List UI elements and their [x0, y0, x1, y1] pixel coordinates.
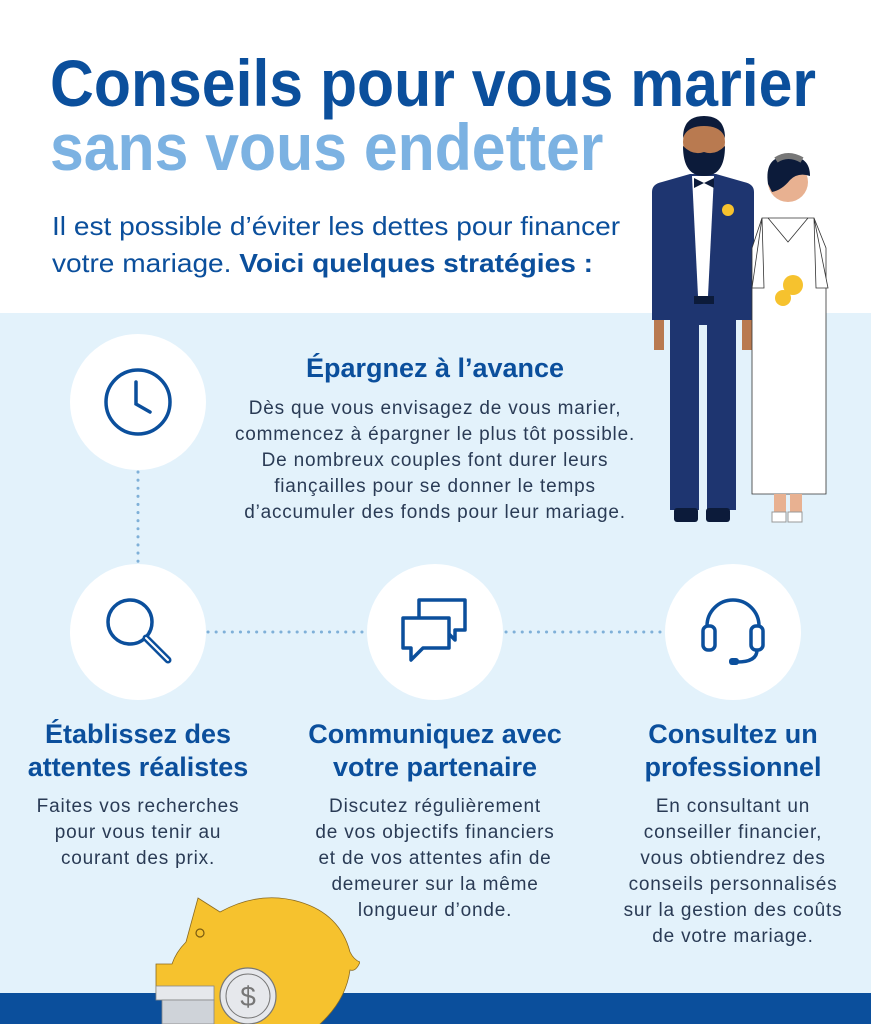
heading: Communiquez: Communiquez avec [308, 719, 562, 749]
text: Épargnez: d’accumuler des fonds pour leur mariage. [244, 502, 626, 523]
text: Consultez: conseiller financier, [644, 822, 822, 843]
title: Conseils pour vous marier [50, 46, 816, 120]
text: Épargnez: commencez à épargner le plus tôt possible. [235, 424, 635, 445]
icon: headset [665, 564, 801, 700]
heading: Établissez [28, 719, 248, 782]
text: Communiquez: longueur d’onde. [358, 900, 512, 921]
heading: Établissez: attentes réalistes [28, 752, 248, 782]
text: Consultez: sur la gestion des coûts [624, 900, 842, 921]
heading: Consultez: Consultez un [648, 719, 818, 749]
light blue band [0, 313, 871, 993]
title [50, 46, 816, 184]
text: Établissez: Faites vos recherches [37, 796, 239, 817]
heading: Consultez [644, 719, 822, 782]
heading: Épargnez: Épargnez à l’avance [306, 353, 564, 383]
subtitle: votre mariage. Voici quelques stratégies : [52, 248, 593, 278]
text: Établissez: courant des prix. [61, 848, 215, 869]
icon: magnifier [70, 564, 206, 700]
text: Consultez [624, 796, 842, 947]
groom [652, 116, 754, 522]
icon: chat bubbles [367, 564, 503, 700]
text: Épargnez [235, 398, 635, 523]
heading: Établissez: Établissez des [45, 719, 231, 749]
text: Consultez: conseils personnalisés [629, 874, 837, 895]
heading: Communiquez: votre partenaire [333, 752, 537, 782]
bride [752, 156, 828, 522]
text: Consultez: En consultant un [656, 796, 810, 817]
text: Communiquez: et de vos attentes afin de [318, 848, 552, 869]
icon: clock [70, 334, 206, 470]
subtitle [52, 211, 620, 278]
text: Établissez: pour vous tenir au [55, 822, 221, 843]
illustration: couple [652, 116, 828, 522]
text: Consultez: de votre mariage. [652, 926, 814, 947]
text: Communiquez: de vos objectifs financiers [315, 822, 555, 843]
text: Consultez: vous obtiendrez des [640, 848, 826, 869]
text: Épargnez: De nombreux couples font durer leurs [262, 450, 608, 471]
title: sans vous endetter [50, 110, 603, 184]
text: Communiquez: demeurer sur la même [331, 874, 539, 895]
text: Communiquez [315, 796, 555, 921]
illustration: piggy bank with coins [156, 897, 360, 1024]
heading: Consultez: professionnel [644, 752, 822, 782]
text: Établissez [37, 796, 239, 869]
text: Épargnez: Dès que vous envisagez de vous marier, [249, 398, 621, 419]
subtitle: Il est possible d’éviter les dettes pour financer [52, 211, 620, 241]
text: Épargnez: fiançailles pour se donner le temps [274, 476, 596, 497]
heading: Communiquez [308, 719, 562, 782]
text: Communiquez: Discutez régulièrement [329, 796, 541, 817]
bottom dark band [0, 993, 871, 1024]
illustration: piggy bank with coins: $ [240, 981, 256, 1012]
